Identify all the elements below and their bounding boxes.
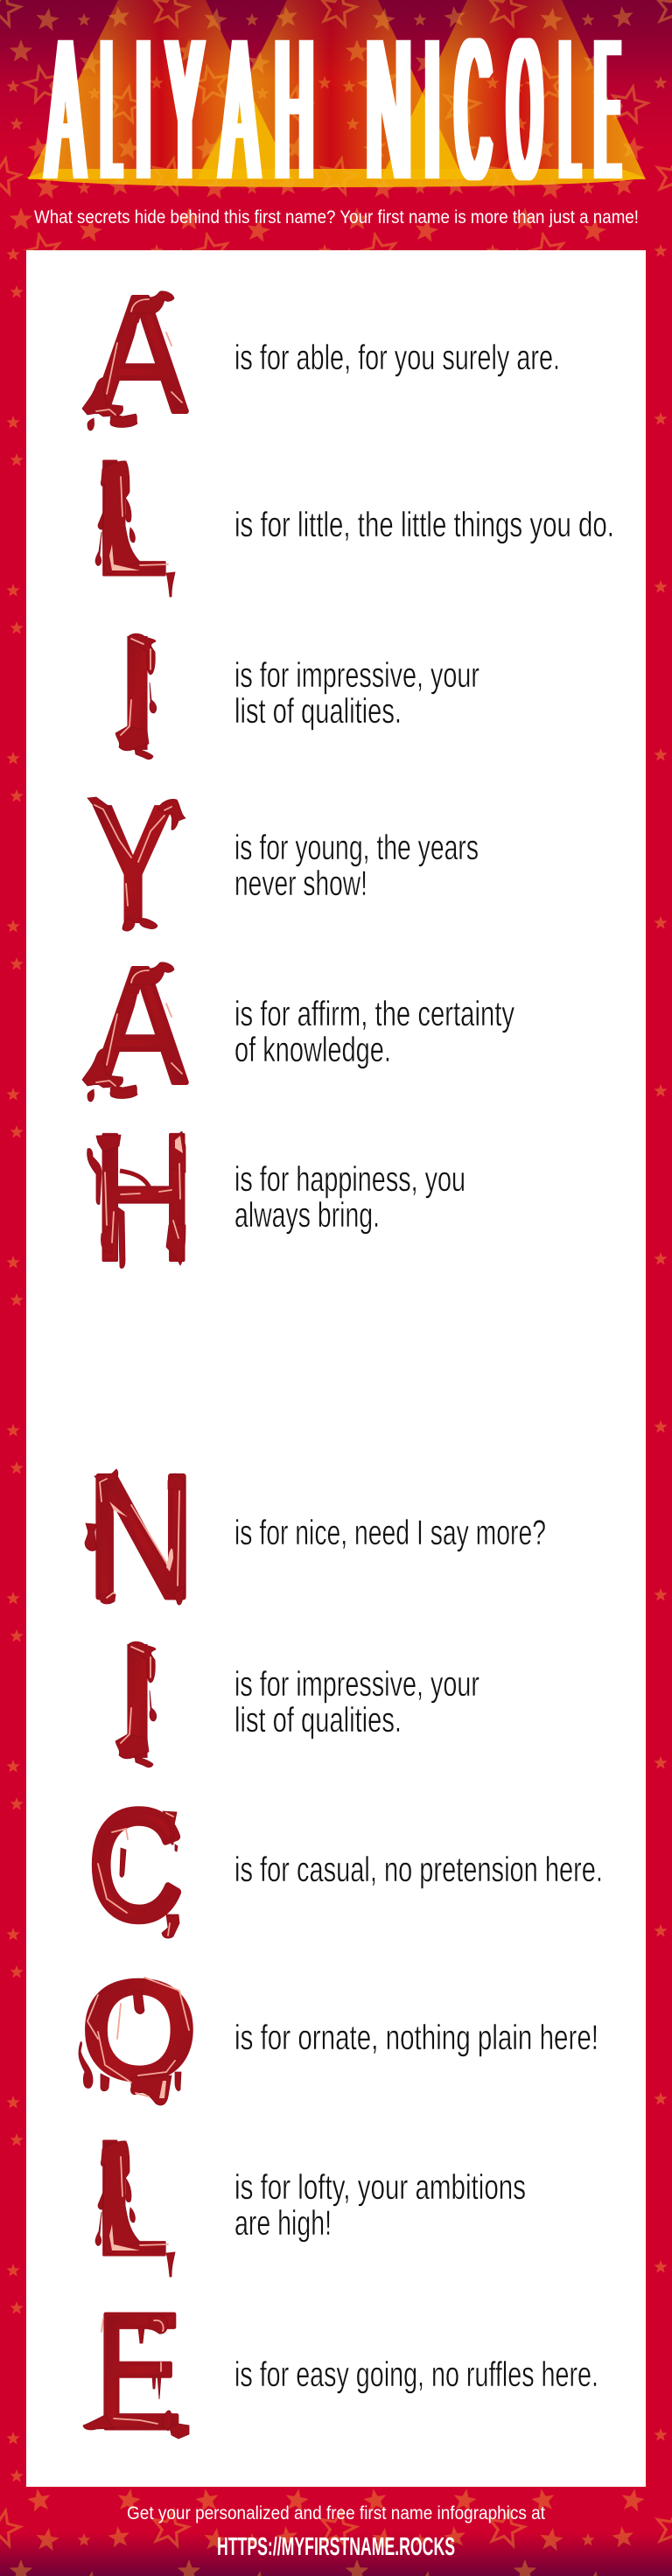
letter I: I (118, 601, 157, 786)
description (234, 995, 514, 1069)
description (234, 2168, 526, 2243)
letter L: L (92, 425, 170, 610)
letter I: I (118, 1609, 157, 1794)
letter O: O (79, 1948, 200, 2112)
letter A: A (93, 934, 187, 1118)
row: O ornate (79, 1948, 598, 2112)
footer url: HTTPS://MYFIRSTNAME.ROCKS (217, 2533, 455, 2561)
description: never show! (234, 864, 368, 903)
description: is for affirm, the certainty (234, 995, 514, 1033)
title: I (425, 0, 439, 221)
footer text: Get your personalized and free first name infographics at (127, 2503, 545, 2524)
description: is for impressive, your (234, 656, 480, 695)
title: O (508, 0, 542, 221)
description: always bring. (234, 1196, 380, 1235)
letter C: C (88, 1778, 183, 1952)
description: list of qualities. (234, 692, 402, 731)
description: is for young, the years (234, 829, 479, 867)
row: L lofty (92, 2105, 526, 2290)
description: is for nice, need I say more? (234, 1514, 546, 1552)
letter Y: Y (90, 767, 176, 960)
title: L (102, 0, 120, 221)
description (234, 1665, 480, 1740)
description: is for lofty, your ambitions (234, 2168, 526, 2207)
letter E: E (94, 2279, 183, 2464)
row: A affirm (82, 934, 514, 1118)
letter H: H (92, 1095, 195, 1298)
letter L: L (92, 2105, 170, 2290)
title: A (221, 0, 258, 221)
row: A able (82, 262, 560, 447)
title: N (367, 0, 411, 221)
letter A: A (93, 262, 187, 447)
description: is for happiness, you (234, 1160, 466, 1199)
spotlights (0, 0, 672, 187)
row: Y young (88, 767, 479, 960)
description (234, 656, 480, 731)
description: is for impressive, your (234, 1665, 480, 1704)
letter N: N (86, 1438, 196, 1634)
row: H happiness (88, 1095, 466, 1298)
description: are high! (234, 2204, 332, 2243)
title: H (276, 0, 312, 221)
title: L (560, 0, 578, 221)
row: I impressive (116, 1609, 480, 1794)
description (234, 829, 479, 903)
description: list of qualities. (234, 1701, 402, 1740)
title (42, 0, 623, 221)
title: I (136, 0, 150, 221)
description (234, 1160, 466, 1235)
row: E easy going (83, 2279, 598, 2464)
title: Y (167, 0, 203, 221)
row: C casual (88, 1778, 603, 1952)
title: C (456, 0, 490, 221)
title: A (47, 0, 84, 221)
row: L little (92, 425, 614, 610)
title: E (596, 0, 620, 221)
description: of knowledge. (234, 1031, 391, 1069)
row: N nice (85, 1438, 546, 1634)
row: I impressive (116, 601, 480, 786)
